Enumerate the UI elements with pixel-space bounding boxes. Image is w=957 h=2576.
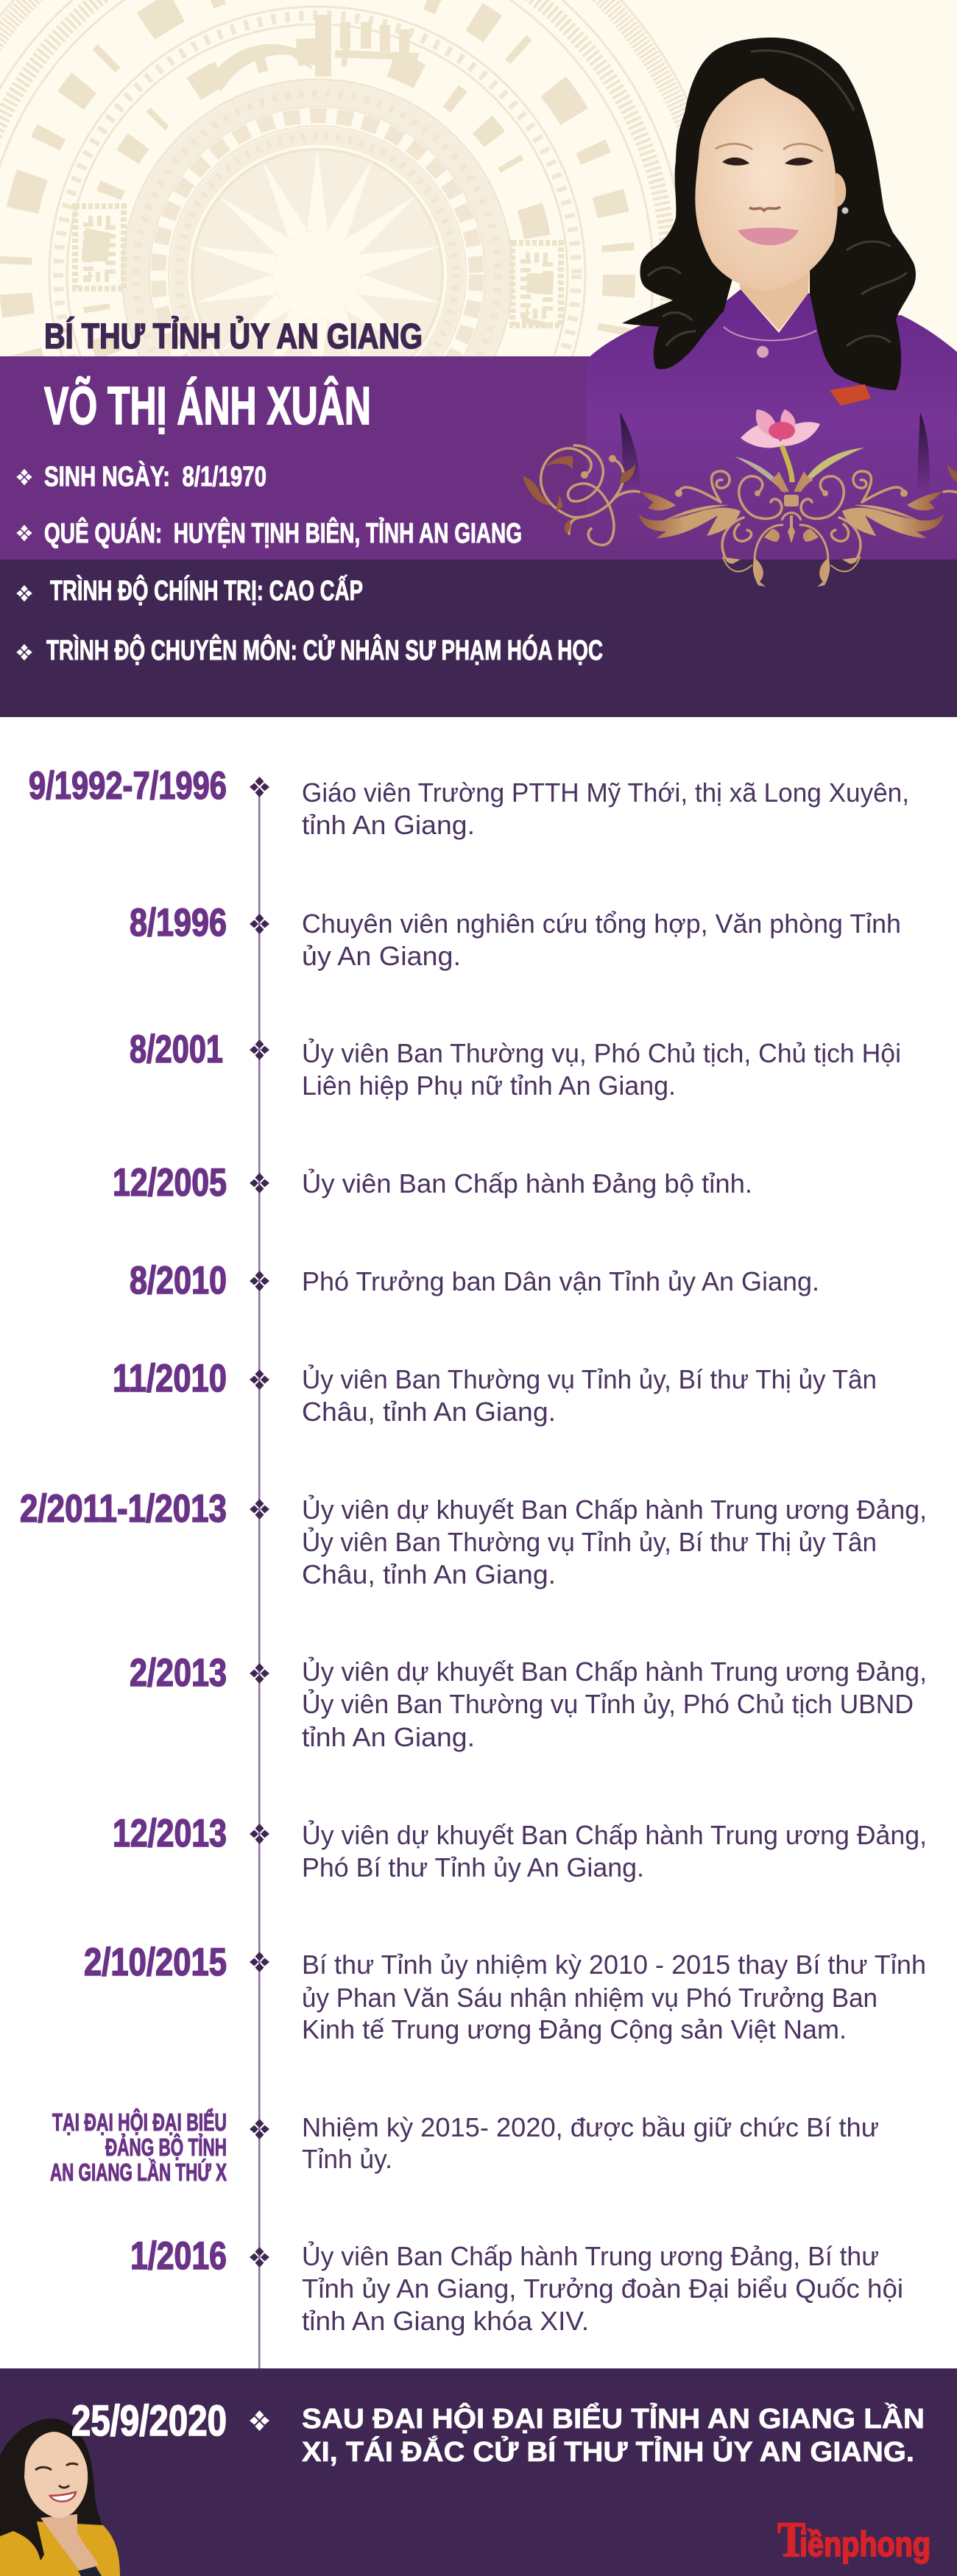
entry 2/2013: Ủy viên Ban Thường vụ Tỉnh ủy, Phó Chủ tịch UBND bbox=[302, 1688, 914, 1719]
entry 2015: ủy Phan Văn Sáu nhận nhiệm vụ Phó Trưởng Ban bbox=[302, 1983, 877, 2013]
pendant bbox=[757, 346, 769, 358]
entry congress: TẠI ĐẠI HỘI ĐẠI BIỂU bbox=[52, 2108, 227, 2136]
face bbox=[695, 78, 838, 291]
badge bbox=[830, 384, 871, 406]
entry 2011 bbox=[20, 1487, 927, 1589]
hair bbox=[0, 2418, 102, 2561]
bullet bbox=[16, 525, 32, 541]
entry 2015 bbox=[84, 1941, 926, 2044]
subtitle: BÍ THƯ TỈNH ỦY AN GIANG bbox=[44, 316, 423, 356]
entry 12/2013: Phó Bí thư Tỉnh ủy An Giang. bbox=[302, 1852, 644, 1882]
bullet bbox=[16, 469, 32, 485]
entry 2016: tỉnh An Giang khóa XIV. bbox=[302, 2306, 589, 2336]
entry 1996: 8/1996 bbox=[130, 901, 227, 945]
hometown: QUÊ QUÁN: HUYỆN TỊNH BIÊN, TỈNH AN GIANG bbox=[44, 517, 522, 549]
entry 2001: Liên hiệp Phụ nữ tỉnh An Giang. bbox=[302, 1070, 676, 1101]
entry 8/2010: Phó Trưởng ban Dân vận Tỉnh ủy An Giang. bbox=[302, 1266, 819, 1296]
entry 11/2010: 11/2010 bbox=[113, 1357, 227, 1400]
timeline bbox=[20, 764, 927, 2336]
portrait: small bbox=[0, 2418, 120, 2576]
features bbox=[35, 2463, 78, 2488]
gold floral ornament bbox=[523, 445, 957, 587]
entry 11/2010: Châu, tỉnh An Giang. bbox=[302, 1397, 556, 1427]
entry 8/2010: 8/2010 bbox=[130, 1259, 227, 1302]
dark info band bbox=[0, 560, 957, 717]
entry 2/2013: 2/2013 bbox=[130, 1651, 227, 1695]
logo: Tiền Phong: iềnphong bbox=[799, 2524, 930, 2563]
entry congress: ĐẢNG BỘ TỈNH bbox=[105, 2133, 227, 2161]
header cream background bbox=[0, 0, 957, 356]
entry 2016: 1/2016 bbox=[130, 2234, 227, 2278]
name: VÕ THỊ ÁNH XUÂN bbox=[44, 376, 371, 436]
face bbox=[24, 2432, 88, 2518]
entry 2015: Bí thư Tỉnh ủy nhiệm kỳ 2010 - 2015 thay Bí thư Tỉnh bbox=[302, 1949, 926, 1980]
entry congress bbox=[50, 2108, 879, 2186]
hair curls bbox=[648, 51, 907, 346]
smile bbox=[50, 2492, 76, 2502]
entry 2011: Ủy viên dự khuyết Ban Chấp hành Trung ương Đảng, bbox=[302, 1494, 927, 1525]
entry 2015: Kinh tế Trung ương Đảng Cộng sản Việt Nam. bbox=[302, 2014, 847, 2044]
entry 1996: ủy An Giang. bbox=[302, 941, 461, 971]
jacket bbox=[0, 2522, 120, 2576]
neck bbox=[735, 258, 810, 331]
entry 2/2013: tỉnh An Giang. bbox=[302, 1722, 475, 1752]
purple info band bbox=[0, 356, 957, 560]
ear and earring bbox=[835, 173, 846, 207]
entry 2005: 12/2005 bbox=[113, 1161, 227, 1204]
entry 11/2010 bbox=[113, 1357, 877, 1427]
logo: Tiền Phong: T bbox=[777, 2511, 805, 2567]
final statement: SAU ĐẠI HỘI ĐẠI BIỂU TỈNH AN GIANG LẦN bbox=[302, 2402, 925, 2435]
entry 12/2013: 12/2013 bbox=[113, 1812, 227, 1855]
entry 12/2013: Ủy viên dự khuyết Ban Chấp hành Trung ương Đảng, bbox=[302, 1819, 927, 1850]
footer band bbox=[0, 2368, 957, 2576]
entry 2011: Châu, tỉnh An Giang. bbox=[302, 1559, 556, 1589]
entry 1992 bbox=[29, 764, 909, 840]
entry 2/2013: Ủy viên dự khuyết Ban Chấp hành Trung ương Đảng, bbox=[302, 1656, 927, 1687]
timeline line bbox=[258, 788, 261, 2369]
professional level: TRÌNH ĐỘ CHUYÊN MÔN: CỬ NHÂN SƯ PHẠM HÓA HỌC bbox=[46, 633, 603, 666]
entry 1992: tỉnh An Giang. bbox=[302, 810, 475, 840]
entry 2016: Ủy viên Ban Chấp hành Trung ương Đảng, Bí thư bbox=[302, 2240, 879, 2271]
house panels bbox=[75, 206, 561, 325]
entry 2/2013 bbox=[130, 1651, 927, 1752]
political level: TRÌNH ĐỘ CHÍNH TRỊ: CAO CẤP bbox=[50, 574, 363, 607]
entry congress: AN GIANG LẦN THỨ X bbox=[50, 2159, 227, 2186]
entry 2016: Tỉnh ủy An Giang, Trưởng đoàn Đại biểu Quốc hội bbox=[302, 2273, 903, 2304]
sleeve shadows bbox=[620, 412, 930, 493]
final statement bbox=[302, 2402, 925, 2468]
entry 2001: 8/2001 bbox=[130, 1028, 223, 1071]
entry 1992: Giáo viên Trường PTTH Mỹ Thới, thị xã Long Xuyên, bbox=[302, 777, 909, 808]
necklace bbox=[724, 327, 816, 340]
dress bbox=[586, 289, 957, 560]
entry 12/2013 bbox=[113, 1812, 927, 1882]
facial features bbox=[716, 144, 823, 245]
portrait: main bbox=[586, 38, 957, 560]
entry 1992: 9/1992-7/1996 bbox=[29, 764, 227, 808]
entry 1996: Chuyên viên nghiên cứu tổng hợp, Văn phòng Tỉnh bbox=[302, 908, 901, 939]
profile facts bbox=[16, 460, 603, 666]
entry 2016 bbox=[130, 2234, 903, 2336]
top bbox=[78, 2566, 102, 2576]
bronze drum pattern bbox=[0, 0, 727, 356]
entry 2005: Ủy viên Ban Chấp hành Đảng bộ tỉnh. bbox=[302, 1168, 752, 1199]
entry 8/2010 bbox=[130, 1259, 819, 1302]
final bullet bbox=[250, 2410, 269, 2431]
center knob bbox=[784, 495, 799, 543]
final date: 25/9/2020 bbox=[71, 2397, 227, 2445]
lotus bbox=[735, 409, 864, 493]
entry 2015: 2/10/2015 bbox=[84, 1941, 227, 1984]
entry 2001 bbox=[130, 1028, 901, 1101]
birth date: SINH NGÀY: 8/1/1970 bbox=[44, 460, 266, 493]
entry congress: Nhiệm kỳ 2015- 2020, được bầu giữ chức Bí thư bbox=[302, 2112, 879, 2142]
entry 11/2010: Ủy viên Ban Thường vụ Tỉnh ủy, Bí thư Thị ủy Tân bbox=[302, 1363, 877, 1394]
entry 2001: Ủy viên Ban Thường vụ, Phó Chủ tịch, Chủ tịch Hội bbox=[302, 1037, 901, 1068]
entry congress: Tỉnh ủy. bbox=[302, 2144, 392, 2174]
entry 1996 bbox=[130, 901, 901, 971]
entry 2011: 2/2011-1/2013 bbox=[20, 1487, 227, 1531]
bullet bbox=[16, 644, 32, 660]
hair bbox=[622, 38, 916, 390]
central pillar and figures bbox=[213, 15, 420, 92]
entry 2011: Ủy viên Ban Thường vụ Tỉnh ủy, Bí thư Thị ủy Tân bbox=[302, 1526, 877, 1557]
final statement: XI, TÁI ĐẮC CỬ BÍ THƯ TỈNH ỦY AN GIANG. bbox=[302, 2435, 914, 2468]
bullet bbox=[16, 585, 32, 601]
neck and chest bbox=[40, 2514, 99, 2571]
entry 2005 bbox=[113, 1161, 752, 1204]
